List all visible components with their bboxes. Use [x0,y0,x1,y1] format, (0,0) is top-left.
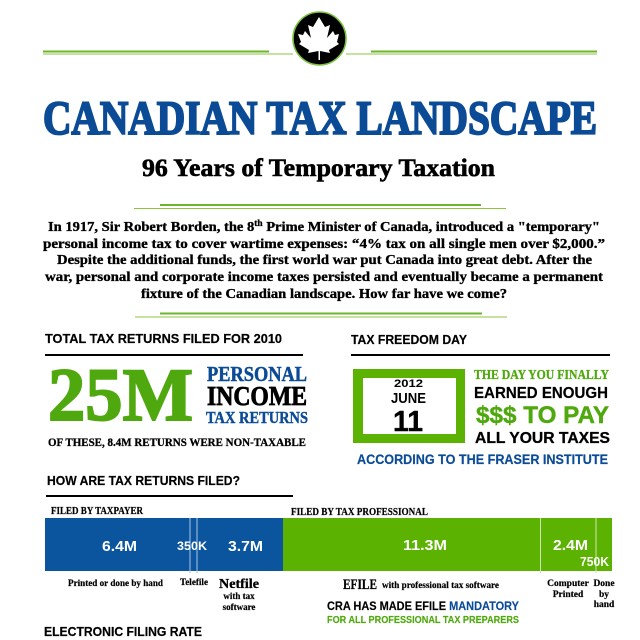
label: filed by taxpayer: FILED BY TAXPAYER [51,506,144,517]
stacked bar chart: 3.7M [228,538,263,555]
bar captions: software [223,602,255,612]
intro paragraph [43,218,605,302]
bar captions: hand [594,600,615,610]
note: non-taxable: OF THESE, 8.4M RETURNS WERE NON-TAXABLE [48,435,306,449]
intro paragraph: war, personal and corporate income taxes persisted and eventually became a permanent [45,270,603,285]
stacked bar chart [45,506,612,573]
panel: tax freedom day [351,332,610,467]
bar captions: Done [593,579,615,589]
callout: the day you finally: $$$ TO PAY [476,402,609,429]
intro paragraph: Prime Minister of Canada, introduced a "temporary" [263,220,600,235]
stacked bar chart: 11.3M [403,537,447,554]
bar captions: Telefile [180,578,208,588]
divider [135,312,507,318]
big number 25M: 25M [48,354,193,437]
callout: the day you finally [474,368,610,447]
label: personal income tax returns: TAX RETURNS [206,408,308,427]
subtitle: 96 Years of Temporary Taxation [142,155,495,182]
bar captions: Netfile [219,577,259,592]
heading: electronic filing rate: ELECTRONIC FILING RATE [44,624,202,639]
intro paragraph: Despite the additional funds, the first world war put Canada into great debt. After the [57,253,592,268]
label: personal income tax returns: PERSONAL [207,362,307,386]
callout: the day you finally: EARNED ENOUGH [474,385,608,402]
bar captions: EFILE [343,577,377,593]
callout: the day you finally: ALL YOUR TAXES [475,430,610,447]
stacked bar chart: 750K [580,555,609,569]
calendar: 2012 [394,378,423,390]
calendar: 11 [393,406,423,438]
intro paragraph: fixture of the Canadian landscape. How far have we come? [141,287,507,302]
bar captions: with professional tax software [382,581,499,591]
callout: the day you finally: THE DAY YOU FINALLY [474,368,609,383]
stacked bar chart: 2.4M [553,537,588,554]
source note: ACCORDING TO THE FRASER INSTITUTE [357,452,608,467]
callout: efile mandatory [327,599,519,626]
bar captions: with tax [223,591,255,601]
label: filed by tax professional: FILED BY TAX PROFESSIONAL [291,507,428,518]
panel: total tax returns [45,331,308,449]
bar captions: Printed or done by hand [68,579,164,589]
heading: total tax returns: TOTAL TAX RETURNS FILED FOR 2010 [45,331,282,346]
bar captions: Computer [547,579,590,589]
bar captions [68,577,615,612]
stacked bar chart: 6.4M [102,538,137,555]
intro paragraph: In 1917, Sir Robert Borden, the 8 [48,220,247,235]
label: personal income tax returns: INCOME [207,381,307,411]
heading: tax freedom day: TAX FREEDOM DAY [351,332,467,347]
bar captions: by [599,590,609,600]
bar captions: Printed [553,590,584,600]
label: personal income tax returns [206,362,308,427]
calendar: JUNE [391,390,426,407]
calendar [353,369,465,443]
callout: efile mandatory: CRA HAS MADE EFILE MANDATORY [327,599,519,613]
stacked bar chart: 350K [177,539,207,553]
heading: how are tax returns filed: HOW ARE TAX RETURNS FILED? [47,473,240,488]
header ornament lines [43,50,597,54]
callout: efile mandatory: FOR ALL PROFESSIONAL TAX PREPARERS [327,615,519,626]
divider [134,204,506,209]
intro paragraph: personal income tax to cover wartime expenses: “4% tax on all single men over $2,000.” [43,237,605,252]
icon: maple leaf badge [293,12,346,65]
intro paragraph: th [254,218,263,228]
